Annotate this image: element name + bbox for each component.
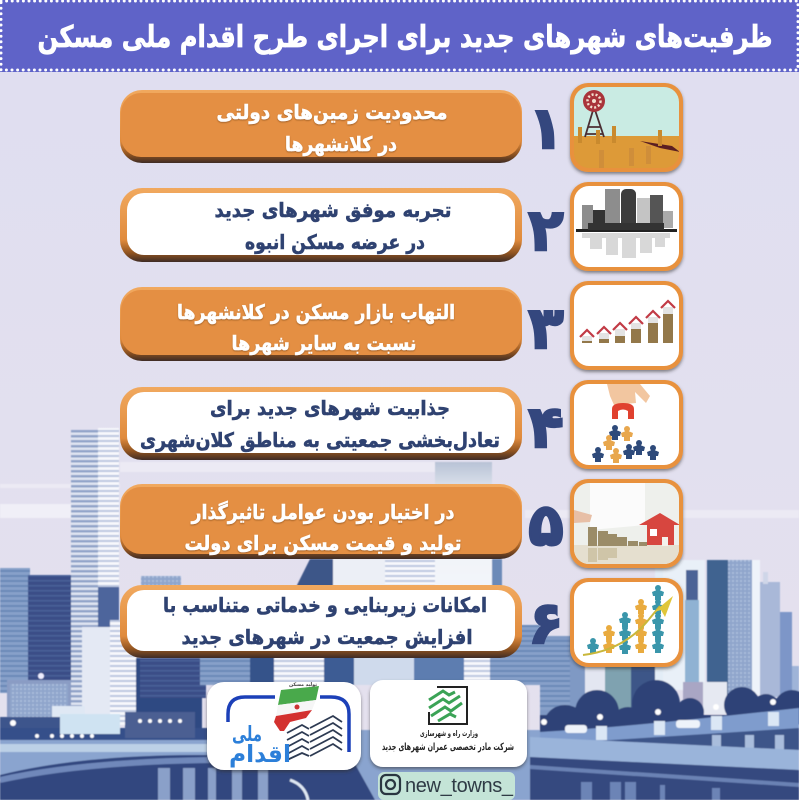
text: item 5: در اختیار بودن عوامل تاثیرگذار: [191, 500, 454, 524]
right towers: [540, 636, 585, 721]
text: item 1: محدودیت زمین‌های دولتی: [216, 100, 448, 124]
number 4: ۴: [528, 393, 564, 461]
text: item 5: [184, 500, 462, 555]
text: item 6: افزایش جمعیت در شهرهای جدید: [182, 625, 472, 649]
right roadway: [540, 708, 799, 745]
logo tagline: تولید مسکن: [289, 682, 317, 688]
text: item 3: التهاب بازار مسکن در کلانشهرها: [177, 300, 455, 324]
text: item 1: در کلانشهرها: [285, 132, 397, 156]
logo buildings: [287, 716, 342, 760]
icon: magnet attracting people: [570, 380, 683, 469]
logo card: national housing action: [207, 682, 361, 770]
text: item 3: [177, 300, 455, 355]
logo card: new towns company: [370, 680, 527, 767]
instagram handle: [378, 772, 515, 800]
panel: item 2: [120, 188, 522, 262]
text: item 4: جذابیت شهرهای جدید برای: [210, 396, 450, 420]
instagram handle: new_towns_: [405, 775, 514, 797]
panel: item 3: [120, 287, 522, 361]
text: item 2: تجربه موفق شهرهای جدید: [214, 198, 452, 222]
text: item 6: امکانات زیربنایی و خدماتی متناسب با: [163, 593, 487, 617]
panel: item 6: [120, 585, 522, 658]
panel: item 1: [120, 90, 522, 163]
number 1: ۱: [528, 94, 564, 162]
text: item 4: [140, 396, 500, 452]
number 6: ۶: [528, 589, 564, 657]
icon: population growth chart: [570, 578, 683, 667]
city skyline background: [0, 428, 799, 800]
icon: city skyline with reflection: [570, 182, 683, 271]
text: item 1: [216, 100, 448, 156]
text: item 6: [163, 593, 487, 649]
text: item 2: در عرضه مسکن انبوه: [245, 230, 425, 254]
left towers: [0, 568, 30, 693]
logo wordmark: ملی: [232, 723, 262, 747]
blue frame: [228, 697, 349, 752]
text: item 4: تعادل‌بخشی جمعیتی به مناطق کلان‌شهری: [140, 428, 500, 452]
text: item 2: [214, 198, 452, 254]
logo wordmark: [229, 723, 291, 768]
icon: instagram: [381, 775, 400, 794]
number 3: ۳: [528, 294, 564, 362]
number 2: ۲: [528, 196, 564, 264]
panel: item 4: [120, 387, 522, 460]
company name: وزارت راه و شهرسازی: [420, 729, 478, 738]
number 5: ۵: [528, 491, 564, 559]
icon: rising house prices: [570, 281, 683, 370]
ministry emblem: [429, 687, 467, 724]
logo card: new towns company: شرکت مادر تخصصی عمران شهرهای جدید: [382, 742, 514, 753]
text: item 5: تولید و قیمت مسکن برای دولت: [184, 531, 462, 555]
centre city: [141, 576, 181, 591]
icon: coins and red house: [570, 479, 683, 568]
title banner: [0, 0, 799, 72]
panel: item 5: [120, 484, 522, 559]
text: item 3: نسبت به سایر شهرها: [232, 331, 416, 355]
left roadway: [0, 730, 799, 800]
flag: [274, 686, 319, 731]
logo wordmark: اقدام: [229, 741, 291, 768]
icon: farmland with windmill: [570, 83, 683, 172]
right trees: [540, 680, 799, 749]
